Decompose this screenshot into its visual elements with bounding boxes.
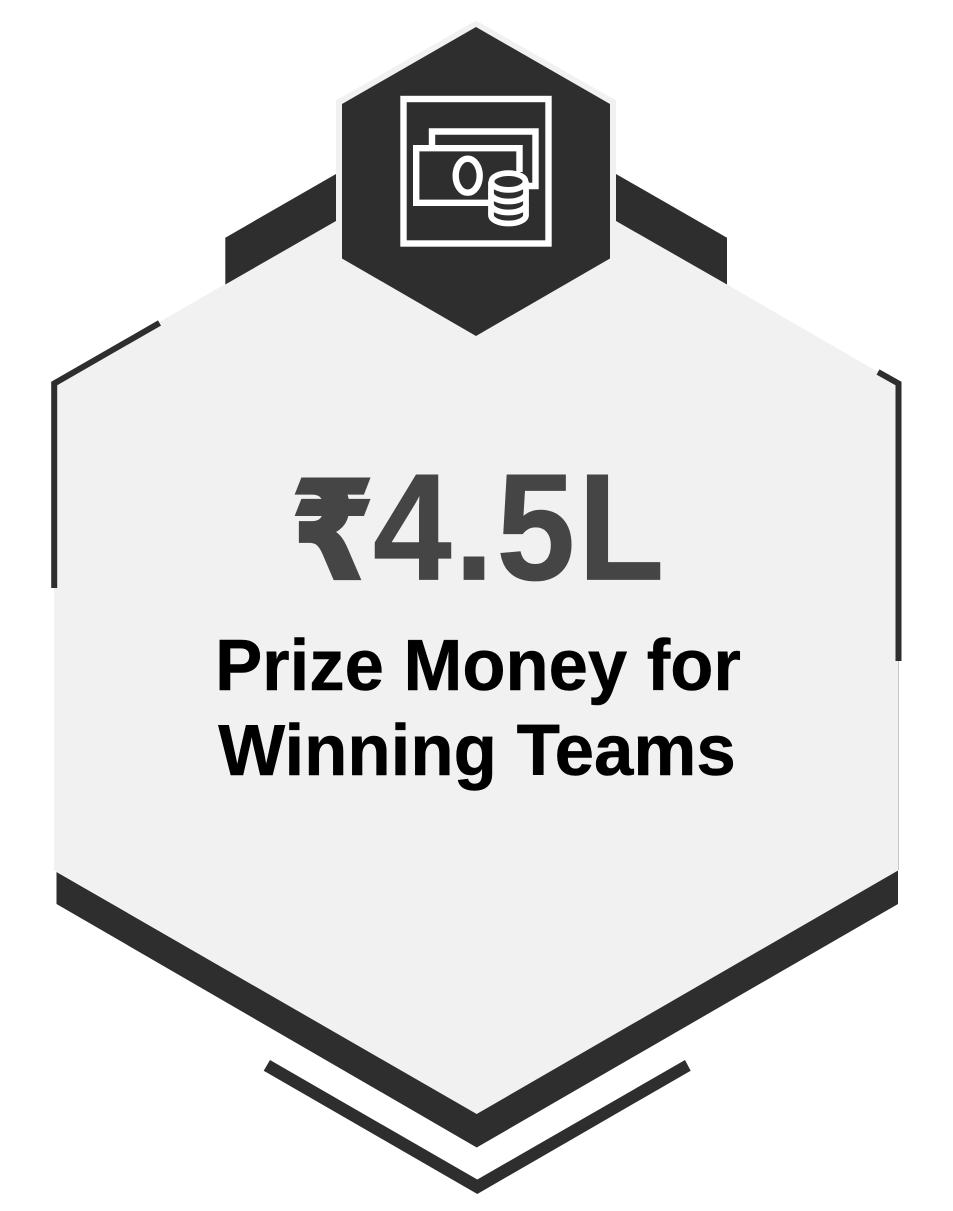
outline: upper left corner [54, 323, 160, 588]
icon frame [404, 99, 548, 244]
value: prize amount: ₹ [292, 452, 373, 610]
chevron: lower accent [264, 1060, 691, 1194]
heading: prize money description: Winning Teams [218, 710, 736, 791]
icon: banknotes and coins [404, 99, 548, 244]
value: prize amount: 4.5L [373, 443, 667, 613]
outline: upper right corner [878, 372, 898, 661]
thin right edge of hexagon [898, 660, 900, 870]
panel: main light hexagon [54, 220, 898, 1114]
front banknote [416, 148, 520, 203]
band: upper left [225, 174, 336, 284]
band: bottom thick chevron [56, 870, 898, 1148]
heading: prize money description: Prize Money for [215, 625, 741, 706]
coin stack [491, 173, 526, 224]
heading: prize money description [215, 625, 741, 791]
banknote oval [456, 159, 480, 193]
icon badge: dark hexagon [336, 20, 616, 343]
band: upper right [616, 174, 727, 284]
back banknote [432, 132, 536, 186]
